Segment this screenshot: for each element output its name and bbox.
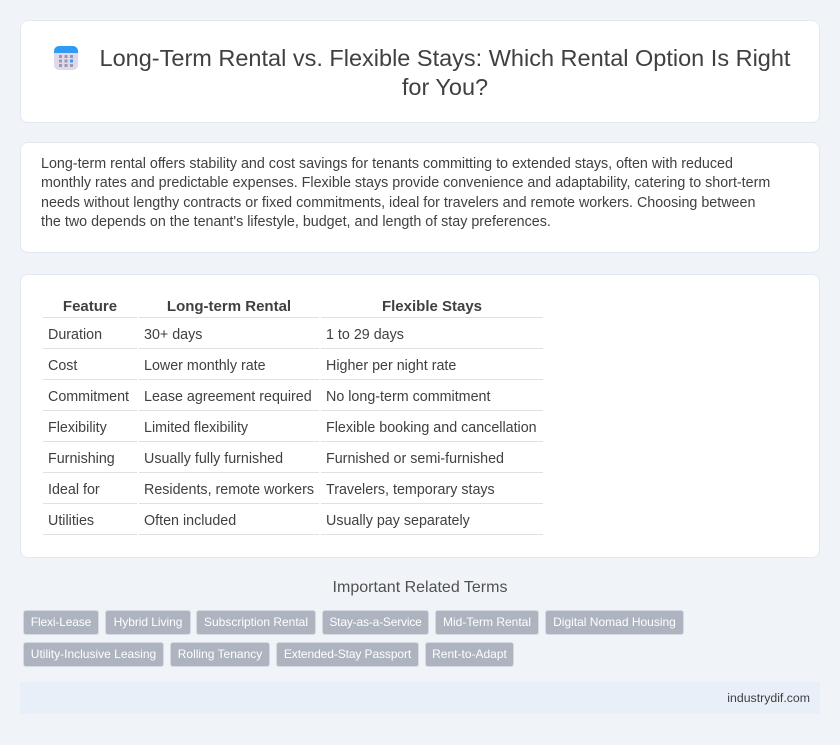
table: feature comparison: Commitment — [48, 388, 129, 404]
text block: introduction: needs without lengthy contracts or fixed commitments, ideal for travelers and remote workers. Choosing between — [41, 195, 755, 211]
footer: industrydif.com — [727, 691, 810, 705]
panel: comparison table — [20, 274, 820, 558]
table: feature comparison: Often included — [144, 512, 236, 528]
text block: introduction — [41, 156, 770, 230]
tags: related terms — [23, 610, 684, 667]
tags: related terms: Utility-Inclusive Leasing — [31, 647, 156, 661]
title: Long-Term Rental vs. Flexible Stays: Which Rental Option Is Right — [100, 45, 790, 71]
title — [100, 45, 790, 100]
table: feature comparison: Travelers, temporary stays — [326, 482, 495, 498]
tags: related terms: Extended-Stay Passport — [284, 647, 411, 661]
text block: introduction: the two depends on the tenant's lifestyle, budget, and length of stay preferences. — [41, 214, 551, 230]
table: feature comparison: Residents, remote workers — [144, 482, 314, 498]
table: feature comparison: Flexible booking and cancellation — [326, 420, 537, 436]
table: feature comparison: Furnishing — [48, 450, 115, 466]
table: feature comparison: 1 to 29 days — [326, 326, 404, 342]
tags: related terms: Mid-Term Rental — [443, 615, 531, 629]
table: feature comparison: Furnished or semi-furnished — [326, 450, 504, 466]
table: feature comparison: Usually pay separately — [326, 512, 470, 528]
table: feature comparison: Limited flexibility — [144, 420, 248, 436]
table: feature comparison: No long-term commitment — [326, 388, 490, 404]
table: feature comparison: Ideal for — [48, 482, 100, 498]
text block: introduction: monthly rates and predictable expenses. Flexible stays provide convenience and adaptability, catering to short-term — [41, 175, 770, 191]
title: for You? — [402, 74, 488, 100]
table: feature comparison: 30+ days — [144, 326, 202, 342]
table: feature comparison: Utilities — [48, 512, 94, 528]
text block: introduction: Long-term rental offers stability and cost savings for tenants committing to extended stays, often with reduced — [41, 156, 733, 172]
table: feature comparison: Duration — [48, 326, 102, 342]
panel: title header — [20, 20, 820, 123]
panel: introduction — [20, 142, 820, 253]
table: feature comparison: Flexible Stays — [382, 298, 482, 315]
tags: related terms: Stay-as-a-Service — [329, 615, 422, 629]
tags: related terms: Hybrid Living — [114, 615, 182, 629]
table: feature comparison: Flexibility — [48, 420, 107, 436]
table: feature comparison: Long-term Rental — [167, 298, 291, 315]
footer — [20, 682, 820, 714]
table: feature comparison: Lease agreement required — [144, 388, 312, 404]
table: feature comparison: Usually fully furnished — [144, 450, 283, 466]
tags: related terms: Rolling Tenancy — [178, 647, 262, 661]
tags: related terms: Subscription Rental — [204, 615, 308, 629]
tags: related terms: Rent-to-Adapt — [432, 647, 507, 661]
heading: related terms: Important Related Terms — [333, 579, 507, 596]
table: feature comparison: Cost — [48, 358, 77, 374]
tags: related terms: Digital Nomad Housing — [553, 615, 676, 629]
table: feature comparison: Lower monthly rate — [144, 358, 266, 374]
table: feature comparison: Higher per night rate — [326, 358, 456, 374]
table: feature comparison: Feature — [63, 298, 117, 315]
icon: calendar — [54, 46, 78, 70]
table: feature comparison — [43, 298, 543, 535]
tags: related terms: Flexi-Lease — [31, 615, 91, 629]
